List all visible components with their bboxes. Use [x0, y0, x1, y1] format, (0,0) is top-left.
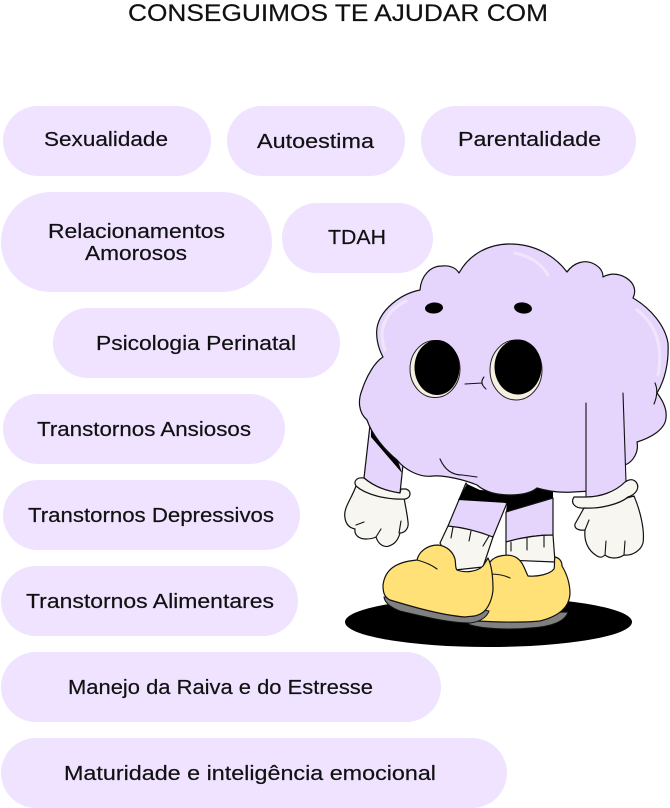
pill: Transtornos Depressivos: Transtornos Depressivos	[28, 505, 274, 527]
pill: Parentalidade: Parentalidade	[458, 129, 601, 151]
mouth	[465, 377, 486, 389]
pill: Maturidade e inteligência emocional: Maturidade e inteligência emocional	[64, 763, 436, 785]
left shoe	[383, 545, 493, 623]
pill: Relacionamentos Amorosos: Amorosos	[85, 243, 187, 265]
pill: Transtornos Ansiosos	[3, 394, 285, 464]
pill: Transtornos Ansiosos: Transtornos Ansiosos	[37, 419, 251, 441]
pill: TDAH: TDAH	[328, 227, 386, 249]
left eyebrow	[425, 302, 443, 314]
pill: Parentalidade	[421, 106, 636, 176]
pill: Autoestima: Autoestima	[257, 131, 375, 153]
pill: TDAH	[282, 203, 433, 273]
pill: Psicologia Perinatal	[53, 308, 340, 378]
right glove	[573, 480, 643, 558]
pill: Manejo da Raiva e do Estresse	[1, 652, 441, 722]
body creases	[440, 383, 657, 477]
ground shadow	[345, 597, 632, 647]
pill: Transtornos Alimentares: Transtornos Alimentares	[26, 591, 274, 613]
right shoe	[468, 555, 570, 629]
right leg	[506, 498, 555, 562]
left leg	[440, 483, 553, 570]
pill: Maturidade e inteligência emocional	[1, 738, 507, 808]
right eyebrow	[513, 301, 533, 315]
pill: Relacionamentos Amorosos: Relacionamentos	[48, 221, 225, 243]
pill: Relacionamentos Amorosos	[1, 192, 272, 292]
body	[359, 244, 668, 495]
pill: Transtornos Depressivos	[3, 480, 300, 550]
left arm	[364, 424, 403, 493]
left eye	[410, 340, 460, 398]
pill: Manejo da Raiva e do Estresse: Manejo da Raiva e do Estresse	[68, 677, 373, 699]
sleeve lines	[586, 393, 626, 497]
right sleeve	[586, 393, 626, 497]
pill: Transtornos Alimentares	[1, 566, 298, 636]
left glove	[345, 478, 410, 547]
body highlights	[382, 253, 660, 375]
pill: Sexualidade: Sexualidade	[44, 129, 168, 151]
illustration: brain character	[345, 244, 668, 647]
pill: Sexualidade	[3, 106, 211, 176]
title: CONSEGUIMOS TE AJUDAR COM	[128, 0, 548, 27]
pill: Psicologia Perinatal: Psicologia Perinatal	[96, 333, 296, 355]
right eye	[490, 340, 542, 400]
pill: Autoestima	[227, 106, 405, 176]
